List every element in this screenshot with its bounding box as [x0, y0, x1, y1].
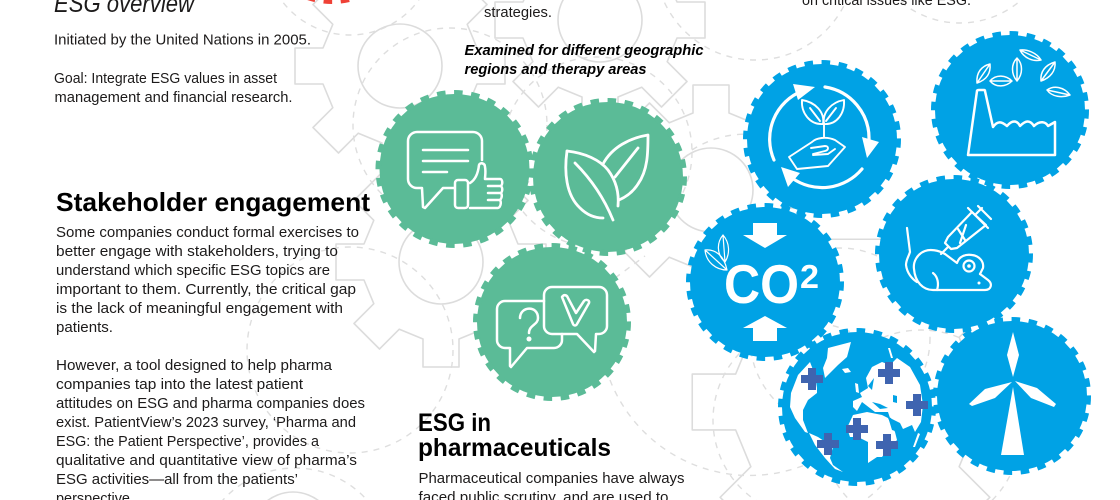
stakeholder body: However, a tool designed to help pharma	[56, 357, 333, 374]
bold italic note: regions and therapy areas	[464, 61, 646, 78]
icon: syringe	[941, 206, 991, 254]
green gear: feedback bubble with thumbs up	[378, 93, 530, 245]
overview body: Goal: Integrate ESG values in asset	[54, 70, 278, 87]
icon: down arrow	[743, 223, 787, 248]
blue gear: globe with plus markers	[781, 331, 933, 483]
text block: strategies and geographic note	[464, 4, 704, 78]
green gear: leaves	[532, 101, 684, 253]
icon: small leaves	[705, 235, 729, 270]
icon: turbine	[969, 332, 1056, 455]
overview body: Initiated by the United Nations in 2005.	[54, 32, 311, 48]
green gear: question and check speech bubbles	[476, 246, 628, 398]
red gear badge (cropped at top)	[256, 0, 408, 1]
stakeholder body	[56, 224, 365, 500]
stakeholder body: important to them. Currently, the critical gap	[56, 281, 356, 298]
overview body: management and financial research.	[54, 89, 292, 106]
stakeholder body: Some companies conduct formal exercises to	[56, 224, 359, 241]
CO2 label: 2	[800, 258, 819, 295]
pharmaceuticals body: Pharmaceutical companies have always	[418, 470, 684, 487]
bold italic note: Examined for different geographic	[464, 42, 704, 59]
icon: inland seas	[868, 378, 897, 431]
blue gear: wind turbine	[936, 320, 1088, 472]
stakeholder body: understand which specific ESG topics are	[56, 262, 330, 279]
blue gear: plant in hand with cycle arrows	[746, 63, 898, 215]
stakeholder body: qualitative and quantitative view of pharma’s	[56, 452, 357, 469]
stakeholder body: ESG: the Patient Perspective’, provides a	[56, 433, 320, 450]
icon: floating leaves	[977, 50, 1070, 97]
icon: factory	[968, 90, 1055, 155]
CO2 label: CO	[724, 253, 799, 315]
text block: ESG overview	[54, 0, 311, 106]
stakeholder body: attitudes on ESG and pharma companies does	[56, 395, 365, 412]
overview body	[54, 32, 311, 106]
heading: ESG in pharmaceuticals	[418, 409, 611, 462]
heading: ESG in pharmaceuticals: ESG in	[418, 409, 491, 437]
pharmaceuticals body	[418, 470, 684, 500]
stakeholder body: exist. PatientView’s 2023 survey, ‘Pharma and	[56, 414, 356, 431]
stakeholder body: ESG activities—all from the patients’	[56, 471, 298, 488]
icon: speech bubbles	[497, 287, 607, 367]
icon: up arrow	[743, 316, 787, 341]
icon: speech bubble and thumb	[408, 132, 502, 208]
icon: cycle arrows	[770, 84, 879, 188]
stakeholder body: patients.	[56, 319, 113, 336]
text block: ESG in pharmaceuticals	[418, 409, 684, 500]
icon: two leaves	[566, 135, 648, 220]
heading: Stakeholder engagement: Stakeholder engagement	[56, 187, 370, 217]
background gears and dashed circles	[198, 0, 1053, 500]
heading: ESG in pharmaceuticals: pharmaceuticals	[418, 434, 611, 462]
blue gear: lab mouse and syringe	[878, 178, 1030, 330]
icon: continents	[790, 342, 923, 472]
stakeholder body: is the lack of meaningful engagement with	[56, 300, 343, 317]
blue gear: CO2	[689, 206, 841, 358]
stakeholder body: companies tap into the latest patient	[56, 376, 304, 393]
blue gear: factory and leaves	[934, 34, 1086, 186]
text block: Stakeholder engagement	[56, 187, 370, 500]
bold italic note	[464, 42, 704, 78]
icon: mouse	[906, 228, 991, 290]
strategies line: strategies.	[484, 4, 552, 21]
icon: plus markers	[801, 362, 928, 456]
stakeholder body: better engage with stakeholders, trying to	[56, 243, 338, 260]
icon: plant and hand	[789, 100, 845, 169]
